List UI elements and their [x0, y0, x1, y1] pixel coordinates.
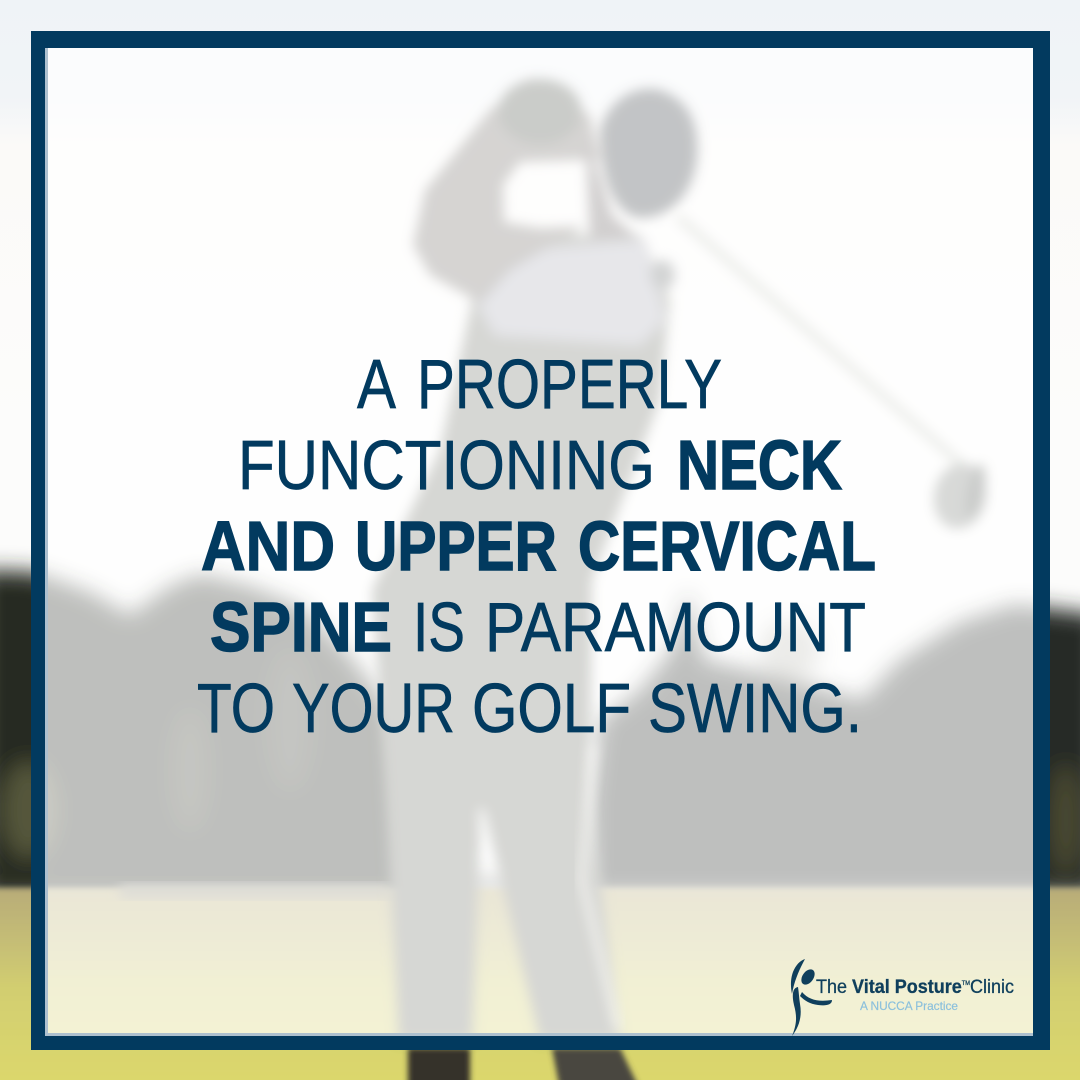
logo: The Vital Posture Clinic	[791, 959, 1014, 1036]
logo wordmark: Clinic	[970, 977, 1014, 998]
headline: TO	[197, 669, 275, 747]
headline: A	[357, 345, 396, 423]
logo wordmark: TM	[962, 981, 970, 987]
logo wordmark: The Vital Posture	[816, 977, 968, 998]
logo tagline: A NUCCA Practice	[860, 999, 958, 1013]
headline	[197, 345, 876, 747]
headline: YOUR	[292, 669, 455, 747]
headline: CERVICAL	[578, 507, 876, 585]
headline: NECK	[677, 426, 842, 504]
headline: UPPER	[355, 507, 557, 585]
headline: SPINE	[210, 588, 392, 666]
headline: PROPERLY	[417, 345, 722, 423]
headline: SWING.	[648, 669, 862, 747]
headline: IS	[413, 588, 465, 666]
headline: AND	[201, 507, 335, 585]
headline: PARAMOUNT	[485, 588, 866, 666]
icon: posture figure	[791, 959, 832, 1036]
headline: GOLF	[472, 669, 631, 747]
headline: FUNCTIONING	[238, 426, 655, 504]
